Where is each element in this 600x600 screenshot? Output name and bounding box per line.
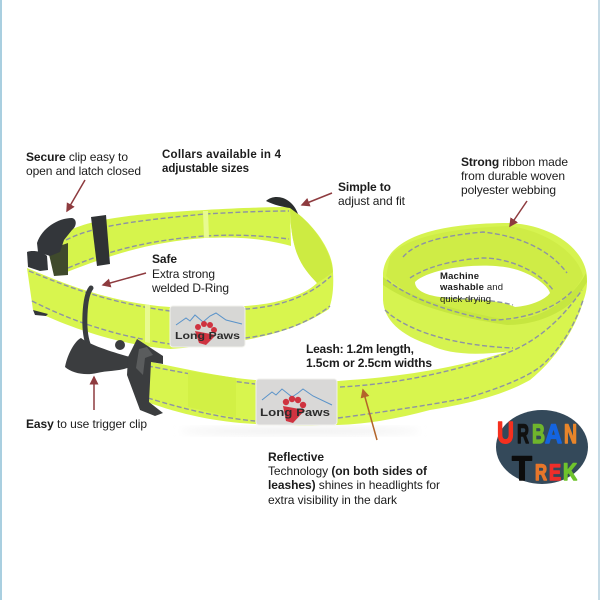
leash badge — [256, 379, 337, 425]
label: secure clip: Secure clip easy to — [26, 150, 128, 164]
label: strong ribbon: polyester webbing — [461, 183, 556, 197]
logo: Urban Trek — [496, 410, 588, 488]
label: leash sizes — [306, 342, 432, 370]
buckle shadow — [48, 243, 68, 276]
label: strong ribbon — [461, 155, 568, 197]
collar back strap — [62, 207, 291, 274]
side release buckle — [27, 218, 76, 316]
collar front strap — [27, 208, 333, 349]
logo: Urban Trek: E — [549, 460, 561, 485]
label: secure clip — [26, 150, 141, 178]
icon: trigger clip — [65, 338, 163, 416]
leash — [147, 282, 587, 434]
label: reflective: leashes) shines in headlights for — [268, 478, 440, 492]
label: trigger clip: Easy to use trigger clip — [26, 417, 147, 431]
logo: Urban Trek: A — [545, 419, 562, 449]
collar badge — [170, 306, 245, 347]
collar — [27, 197, 333, 349]
logo: Urban Trek: U — [497, 415, 514, 450]
label: simple to adjust: adjust and fit — [338, 194, 406, 208]
collar badge: Long Paws — [175, 331, 241, 342]
label: safe D-ring — [151, 252, 229, 295]
logo: Urban Trek: B — [532, 419, 545, 449]
logo: Urban Trek: K — [563, 459, 578, 486]
label: simple to adjust — [338, 180, 406, 208]
label: collar sizes: Collars available in 4 — [162, 149, 282, 161]
label: leash sizes: 1.5cm or 2.5cm widths — [306, 356, 432, 370]
logo: Urban Trek: R — [517, 419, 529, 449]
arrow: secure clip — [67, 180, 85, 211]
label: strong ribbon: Strong ribbon made — [461, 155, 568, 169]
label: reflective — [268, 450, 440, 507]
label: machine washable — [439, 271, 503, 305]
label: reflective: extra visibility in the dark — [268, 493, 398, 507]
label: leash sizes: Leash: 1.2m length, — [306, 342, 414, 356]
label: safe D-ring: welded D-Ring — [151, 281, 229, 295]
label: collar sizes: adjustable sizes — [162, 163, 249, 175]
label: reflective: Technology (on both sides of — [268, 464, 428, 478]
arrow: reflective — [363, 390, 377, 440]
arrow: simple to adjust — [302, 193, 332, 205]
arrow: strong ribbon — [510, 201, 527, 226]
label: collar sizes — [162, 149, 282, 175]
label: machine washable: Machine — [440, 271, 479, 282]
label: reflective: Reflective — [268, 450, 324, 464]
logo: Urban Trek: R — [535, 460, 547, 485]
label: machine washable: washable and — [439, 282, 503, 293]
coil opening — [415, 266, 550, 307]
logo: Urban Trek: T — [512, 450, 532, 488]
label: safe D-ring: Extra strong — [152, 267, 215, 281]
logo: Urban Trek: N — [564, 419, 577, 449]
label: simple to adjust: Simple to — [338, 180, 391, 194]
label: strong ribbon: from durable woven — [461, 169, 565, 183]
strap adjuster — [266, 197, 298, 214]
label: machine washable: quick drying — [440, 294, 491, 305]
leash badge: Long Paws — [260, 407, 330, 419]
arrow: trigger clip — [93, 377, 95, 410]
label: safe D-ring: Safe — [152, 252, 177, 266]
icon: D-ring — [85, 288, 91, 344]
label: secure clip: open and latch closed — [26, 164, 141, 178]
collar keeper loop — [91, 215, 110, 266]
arrow: safe D-ring — [103, 273, 146, 285]
leash coil — [383, 223, 587, 354]
